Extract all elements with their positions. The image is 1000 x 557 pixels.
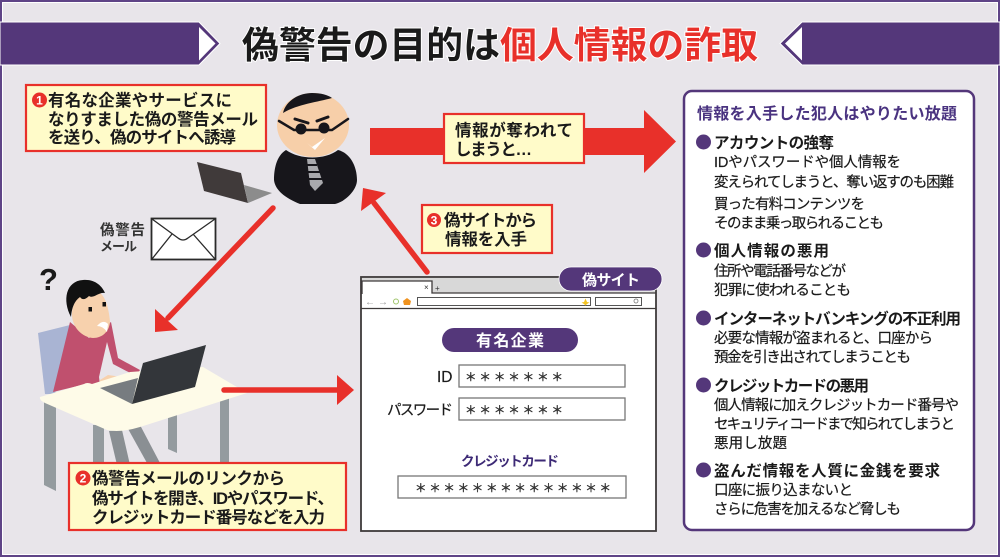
- icon: question mark: ?: [39, 262, 58, 297]
- label: fake warning email: 偽警告: [100, 221, 145, 239]
- item: account takeover: アカウントの強奪: [714, 134, 834, 152]
- callout: step 1: を送り、偽のサイトへ誘導: [48, 128, 236, 147]
- label: fake site pill: [559, 267, 662, 291]
- label: famous company pill: 有名企業: [476, 331, 544, 350]
- item: credit card misuse: クレジットカードの悪用: [714, 377, 869, 395]
- callout: step 1: [26, 85, 266, 151]
- icon: fake warning email: [152, 218, 216, 260]
- callout: step 2: 偽警告メールのリンクから: [92, 469, 285, 488]
- callout: step 2: [69, 463, 346, 530]
- form field: password: パスワード: [387, 402, 453, 419]
- icon: confused user at laptop: [38, 280, 247, 491]
- callout: step 2: クレジットカード番号などを入力: [92, 508, 325, 527]
- item: ransom demand: さらに危害を加えるなど脅しも: [714, 501, 901, 518]
- callout: step 1: 有名な企業やサービスに: [48, 90, 232, 110]
- panel: fake website browser: +: [435, 284, 440, 293]
- panel: fake website browser: [361, 277, 656, 531]
- item: account takeover: IDやパスワードや個人情報を: [714, 154, 901, 171]
- arrow: scammer to victim: [155, 208, 273, 332]
- callout: step 1: 1: [36, 94, 43, 108]
- item: account takeover: そのまま乗っ取られることも: [714, 215, 884, 232]
- item: online banking fraud: インターネットバンキングの不正利用: [714, 309, 961, 328]
- item: credit card misuse: セキュリティコードまで知られてしまうと: [714, 416, 955, 433]
- form field: ID: ID: [437, 369, 452, 386]
- label: famous company pill: [442, 328, 578, 352]
- callout: step 2: 2: [80, 472, 87, 486]
- form field: ID: ＊＊＊＊＊＊＊: [465, 372, 563, 384]
- callout: information stolen: 情報が奪われて: [455, 120, 573, 140]
- item: credit card misuse: 個人情報に加えクレジットカード番号や: [714, 397, 959, 414]
- callout: step 2: 偽サイトを開き、IDやパスワード、: [92, 489, 334, 508]
- arrow: fake site to scammer: [361, 188, 427, 272]
- panel: fake website browser: ×: [424, 283, 429, 292]
- title band left: [0, 22, 220, 65]
- item: account takeover: 買った有料コンテンツを: [714, 196, 865, 213]
- label: fake warning email: メール: [100, 239, 137, 254]
- callout: information stolen: [444, 114, 584, 163]
- callout: step 3: [422, 205, 552, 253]
- title band right: [780, 22, 1000, 65]
- form field: password: [387, 398, 625, 420]
- callout: step 1: なりすました偽の警告メール: [48, 110, 258, 129]
- arrow: information stolen: [370, 110, 676, 173]
- callout: step 3: 3: [431, 214, 438, 228]
- item: personal data misuse: 住所や電話番号などが: [714, 263, 846, 280]
- form field: password: ＊＊＊＊＊＊＊: [465, 405, 563, 417]
- item: account takeover: [696, 134, 954, 232]
- title: 偽警告の目的は個人情報の詐取: [242, 25, 758, 66]
- callout: step 3: 情報を入手: [445, 229, 527, 249]
- panel: fake website browser: ←: [365, 297, 375, 308]
- callout: step 3: 偽サイトから: [444, 211, 537, 230]
- arrow: user to fake site: [224, 375, 354, 405]
- icon: scammer: [274, 93, 357, 204]
- callout: information stolen: しまうと…: [455, 141, 532, 159]
- item: ransom demand: 口座に振り込まないと: [714, 482, 853, 499]
- item: ransom demand: [696, 461, 940, 518]
- item: online banking fraud: [696, 309, 961, 366]
- panel: what criminals can do: [684, 91, 974, 530]
- icon: laptop of scammer: [197, 162, 272, 203]
- form field: credit card: クレジットカード: [461, 454, 559, 469]
- item: account takeover: 変えられてしまうと、奪い返すのも困難: [714, 174, 954, 191]
- item: personal data misuse: 個人情報の悪用: [714, 241, 829, 260]
- item: personal data misuse: 犯罪に使われることも: [714, 282, 851, 299]
- item: credit card misuse: 悪用し放題: [714, 435, 787, 452]
- item: credit card misuse: [696, 377, 959, 452]
- panel heading: 情報を入手した犯人はやりたい放題: [697, 104, 957, 123]
- label: fake warning email: [100, 221, 145, 254]
- item: online banking fraud: 必要な情報が盗まれると、口座から: [714, 330, 933, 347]
- item: personal data misuse: [696, 241, 851, 299]
- form field: credit card: ＊＊＊＊＊＊＊＊＊＊＊＊＊＊: [415, 483, 611, 495]
- panel: fake website browser: →: [378, 297, 388, 308]
- label: fake site pill: 偽サイト: [582, 271, 640, 289]
- form field: ID: [437, 365, 625, 387]
- item: ransom demand: 盗んだ情報を人質に金銭を要求: [714, 461, 940, 480]
- item: online banking fraud: 預金を引き出されてしまうことも: [714, 349, 911, 366]
- form field: credit card: [398, 454, 626, 498]
